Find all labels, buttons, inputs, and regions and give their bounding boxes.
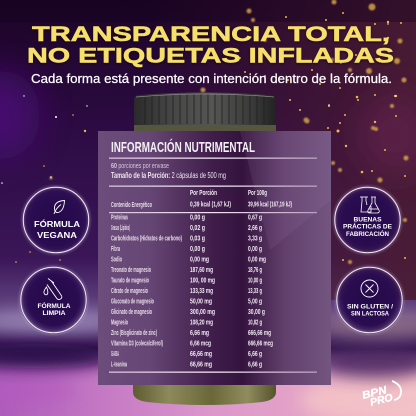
energy row (111, 200, 292, 209)
badge: Fórmula limpia: LIMPIA (42, 310, 66, 317)
nutrition table rows: Gluconato de magnesio (111, 296, 154, 306)
nutrition table rows: 3,33 g (248, 234, 262, 242)
nutrition table rows: Zinc (Bisglicinato de zinc) (111, 328, 157, 337)
nutrition table rows: Sodio (111, 254, 122, 264)
nutrition table rows: 0,00 g (190, 244, 205, 253)
nutrition table rows: 10,00 g (248, 276, 262, 284)
nutrition table rows: 0,02 g (190, 223, 205, 232)
logo: BPN Pro (361, 381, 401, 409)
nutrition table rows: 187,60 mg (190, 265, 213, 274)
nutrition table rows: 66,66 mg (190, 360, 212, 368)
nutrition table rows: 0,00 mg (248, 254, 266, 264)
nutrition table rows: 300,00 mg (190, 307, 215, 316)
nutrition table rows: 0,00 g (190, 212, 205, 222)
nutrition table rows: 6,66 mg (190, 328, 209, 337)
nutrition table rows: 0,67 g (248, 212, 262, 222)
nutrition table rows: 666,66 mg (248, 328, 271, 337)
subtitle: Cada forma está presente con intención dentro de la fórmula. (31, 71, 392, 86)
badge: Buenas prácticas de fabricación: PRÁCTICAS DE (343, 222, 393, 230)
nutrition table rows: 6,66 g (248, 360, 262, 368)
title (27, 23, 394, 68)
badge: Sin gluten / sin lactosa (336, 266, 404, 334)
jar: lid and base behind label (133, 92, 276, 405)
nutrition table rows: Magnesio (111, 318, 128, 326)
nutrition table rows: Fibra (111, 244, 120, 253)
icon: crossed circle (361, 280, 378, 297)
nutrition table rows: 10,82 g (248, 318, 262, 326)
title: NO ETIQUETAS INFLADAS (27, 44, 394, 68)
nutrition table rows: 0,03 g (190, 234, 205, 242)
nutrition table rows: 6,66 g (248, 349, 262, 358)
icon: test tube and drop (44, 278, 62, 300)
nutrition table rows: Vitamina D3 (colecalciferol) (111, 338, 163, 348)
icon: leaf (54, 200, 64, 214)
nutrition table rows: Proteínas (111, 212, 128, 222)
nutrition table rows: 133,33 mg (190, 286, 213, 295)
title: TRANSPARENCIA TOTAL, (32, 23, 390, 46)
badge: Fórmula limpia (20, 266, 88, 334)
nutrition table rows: 13,33 g (248, 286, 262, 295)
nutrition table rows: 100, 00 mg (190, 276, 215, 284)
energy row: 0,39 kcal (1,67 kJ) (190, 200, 231, 208)
column headers: Por 100g (248, 188, 267, 197)
panel: nutrition label (98, 131, 331, 385)
nutrition table rows: Citrato de magnesio (111, 286, 148, 295)
jar base (133, 384, 276, 405)
nutrition table rows: 666,66 mcg (248, 338, 273, 348)
badge: Buenas prácticas de fabricación: BUENAS (354, 216, 382, 224)
column headers: Por Porción (190, 188, 217, 197)
nutrition table rows: 0,00 g (248, 244, 262, 253)
servings text (111, 161, 226, 180)
badge: Fórmula vegana: VEGANA (37, 230, 77, 240)
nutrition table rows: Grasas (Lípidos) (111, 223, 130, 232)
badge: Fórmula limpia: FÓRMULA (38, 302, 71, 310)
nutrition table rows: L-teanina (111, 360, 127, 368)
icon: lab flasks (360, 197, 379, 213)
badge: Sin gluten / sin lactosa: SIN GLUTEN / (347, 304, 393, 310)
servings text: Tamaño de la Porción: 2 cápsulas de 500 mg (111, 171, 226, 180)
badge: Buenas prácticas de fabricación: FABRICACIÓN (346, 229, 389, 238)
nutrition table rows: GABA (111, 349, 119, 358)
energy row: 39,96 kcal (167,19 kJ) (248, 200, 292, 208)
logo: BPN Pro: BPN (361, 384, 388, 402)
logo: BPN Pro: PRO (369, 392, 394, 409)
badge: Fórmula vegana: FÓRMULA (34, 218, 80, 229)
nutrition table rows: 0,00 mg (190, 254, 209, 264)
nutrition table rows: Treonato de magnesio (111, 265, 151, 274)
nutrition table rows: Taurato de magnesio (111, 276, 149, 284)
nutrition table rows: 6,66 mcg (190, 338, 211, 348)
column headers (190, 188, 267, 197)
badge: Sin gluten / sin lactosa: SIN LACTOSA (351, 310, 389, 318)
badge: Buenas prácticas de fabricación (334, 186, 402, 254)
nutrition table rows (111, 212, 273, 368)
nutrition table rows: 18,76 g (248, 265, 262, 274)
nutrition table rows: 50,00 mg (190, 296, 212, 306)
nutrition table rows: 66,66 mg (190, 349, 212, 358)
energy row: Contenido Energético (111, 200, 152, 209)
jar lid (134, 92, 276, 131)
nutrition table rows: 5,00 g (248, 296, 262, 306)
badge: Fórmula vegana (22, 186, 90, 254)
nutrition table rows: Carbohidratos (Hidratos de carbono) (111, 234, 182, 242)
nutrition table rows: 108,20 mg (190, 318, 213, 326)
nutrition table rows: Glicinato de magnesio (111, 307, 152, 316)
gold particles (15, 0, 408, 264)
servings text: 60 porciones por envase (111, 161, 169, 170)
nutrition table rows: 30,00 g (248, 307, 265, 316)
heading: Información nutrimental: INFORMACIÓN NUTRIMENTAL (111, 138, 255, 156)
nutrition table rows: 2,66 g (248, 223, 262, 232)
